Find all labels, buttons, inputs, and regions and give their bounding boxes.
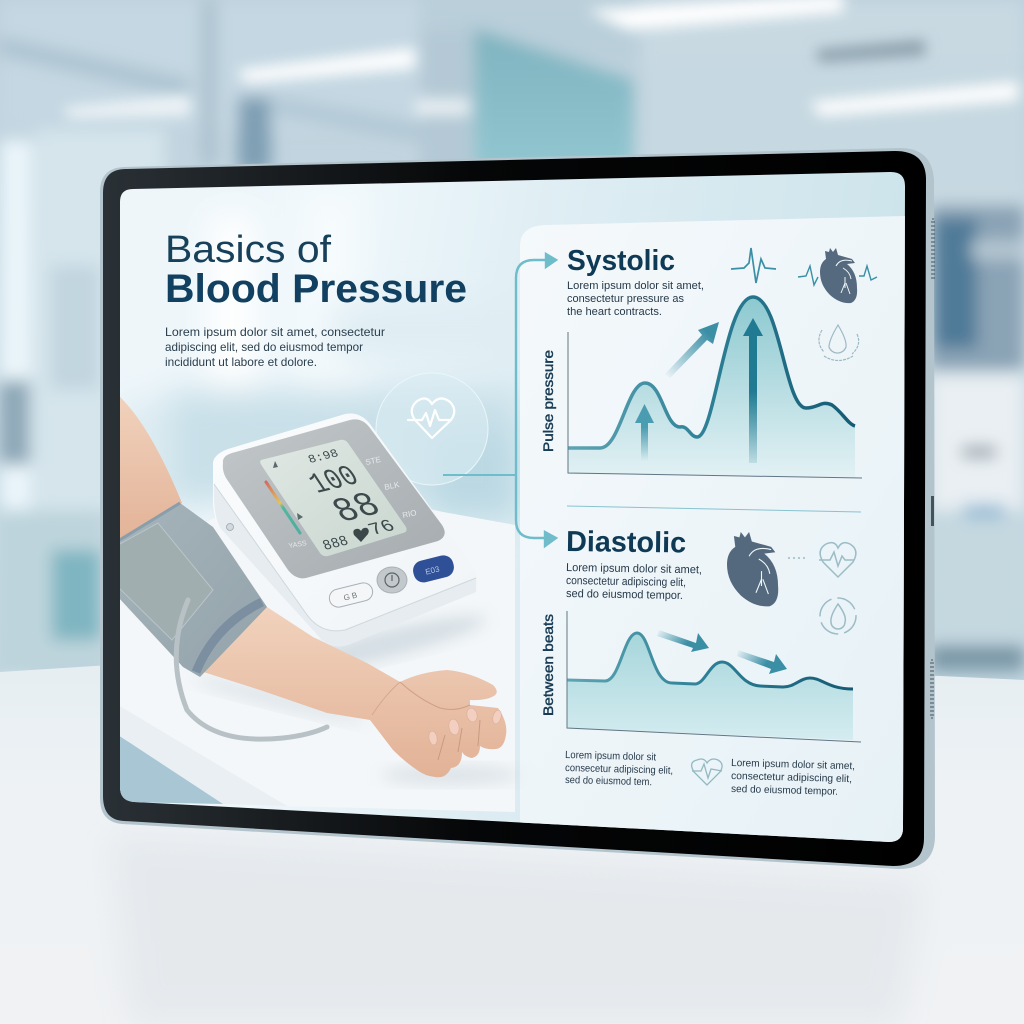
icon: cycle water drop	[820, 598, 856, 634]
tablet device	[100, 148, 935, 869]
text: bottom left note: Lorem ipsum dolor sit	[565, 750, 656, 763]
blurred clinic background	[0, 0, 1024, 720]
tablet screen	[118, 170, 908, 852]
air tube	[176, 600, 327, 739]
axes	[567, 611, 861, 742]
arm upper	[118, 395, 182, 545]
pill buttons: G B	[343, 591, 358, 603]
digital readouts: 100	[302, 460, 366, 501]
title: Basics of	[165, 229, 331, 271]
text: systolic description: the heart contracts.	[567, 306, 662, 318]
text: bottom left note: sed do eiusmod tem.	[565, 775, 652, 788]
intro text	[166, 328, 385, 366]
text: systolic description: consectetur pressure as	[567, 293, 684, 305]
blue button: E03	[424, 564, 441, 577]
arrow: small up	[635, 404, 654, 461]
arrow: second fall	[737, 650, 787, 674]
label: pulse pressure: Pulse pressure	[540, 350, 556, 452]
text: bottom left note: consecetur adipiscing elit,	[565, 763, 673, 777]
tablet metal edge	[100, 148, 935, 869]
icon: ecg pulse	[731, 248, 776, 283]
cuff	[118, 503, 267, 677]
forearm and hand	[197, 607, 506, 777]
side labels: BLK	[384, 480, 401, 492]
title	[168, 234, 466, 302]
intro text: adipiscing elit, sed do eiusmod tempor	[165, 341, 363, 354]
power button	[377, 567, 407, 593]
right content panel	[520, 216, 905, 852]
blue button	[413, 555, 454, 582]
side speaker and button details	[931, 219, 934, 718]
intro text: Lorem ipsum dolor sit amet, consectetur	[165, 326, 385, 339]
side labels: STE	[365, 455, 382, 467]
heading: systolic: Systolic	[567, 245, 675, 277]
heart callout bubble	[376, 373, 488, 485]
text: systolic description	[567, 281, 703, 315]
label: between beats: Between beats	[540, 614, 556, 716]
text: diastolic description: sed do eiusmod tempor.	[566, 588, 683, 602]
monitor body	[213, 414, 432, 518]
pill buttons	[328, 582, 374, 608]
axes	[568, 332, 862, 478]
gray face	[223, 419, 445, 578]
digital readouts: 8:98	[306, 447, 341, 467]
chart: diastolic waveform	[567, 611, 861, 742]
flow arrows	[516, 254, 556, 546]
bp colour scale	[266, 482, 300, 533]
text: diastolic description	[566, 562, 702, 602]
icon: outlined heart	[819, 543, 856, 577]
intro text: incididunt ut labore et dolore.	[165, 356, 317, 369]
icon: small heart	[692, 759, 722, 785]
digital readouts: 888	[321, 534, 351, 555]
text: diastolic description: Lorem ipsum dolor sit amet,	[566, 562, 702, 576]
text: bottom right note: sed do eiusmod tempor.	[731, 784, 838, 798]
text: bottom right note: Lorem ipsum dolor sit amet,	[731, 758, 855, 772]
digital readouts: 88	[325, 486, 389, 532]
arrow: first fall	[657, 630, 709, 652]
white table surface	[0, 665, 1024, 1024]
text: bottom right note	[731, 758, 855, 798]
screen background	[118, 170, 908, 845]
blood pressure monitor	[213, 413, 477, 646]
digital readouts: 76	[364, 516, 400, 540]
text: diastolic description: consectetur adipiscing elit,	[566, 575, 686, 589]
side labels: YASS	[288, 540, 308, 550]
title: Blood Pressure	[165, 267, 467, 311]
icon: large heart	[727, 532, 778, 606]
arrow: diagonal rise	[665, 322, 719, 378]
icon: heart with ecg	[798, 248, 877, 303]
panel: systolic	[540, 245, 877, 478]
dotted link	[788, 557, 806, 559]
lcd screen	[260, 440, 407, 556]
divider	[567, 506, 861, 512]
text: bottom right note: consectetur adipiscing elit,	[731, 771, 852, 785]
tablet bezel	[103, 151, 926, 866]
desk in screen	[120, 510, 515, 812]
panel: diastolic	[540, 526, 861, 798]
icon: heart pulse	[408, 398, 454, 438]
digital readouts	[308, 449, 394, 550]
side labels: RIO	[402, 508, 417, 520]
heading: diastolic: Diastolic	[566, 526, 686, 559]
chart: systolic waveform	[568, 297, 862, 478]
icon: water drop waves	[819, 325, 859, 360]
text: bottom left note	[565, 750, 673, 788]
connector line monitor to charts	[443, 474, 517, 476]
text: systolic description: Lorem ipsum dolor sit amet,	[567, 280, 704, 292]
side labels	[288, 455, 417, 550]
arrow: tall up	[743, 318, 763, 463]
